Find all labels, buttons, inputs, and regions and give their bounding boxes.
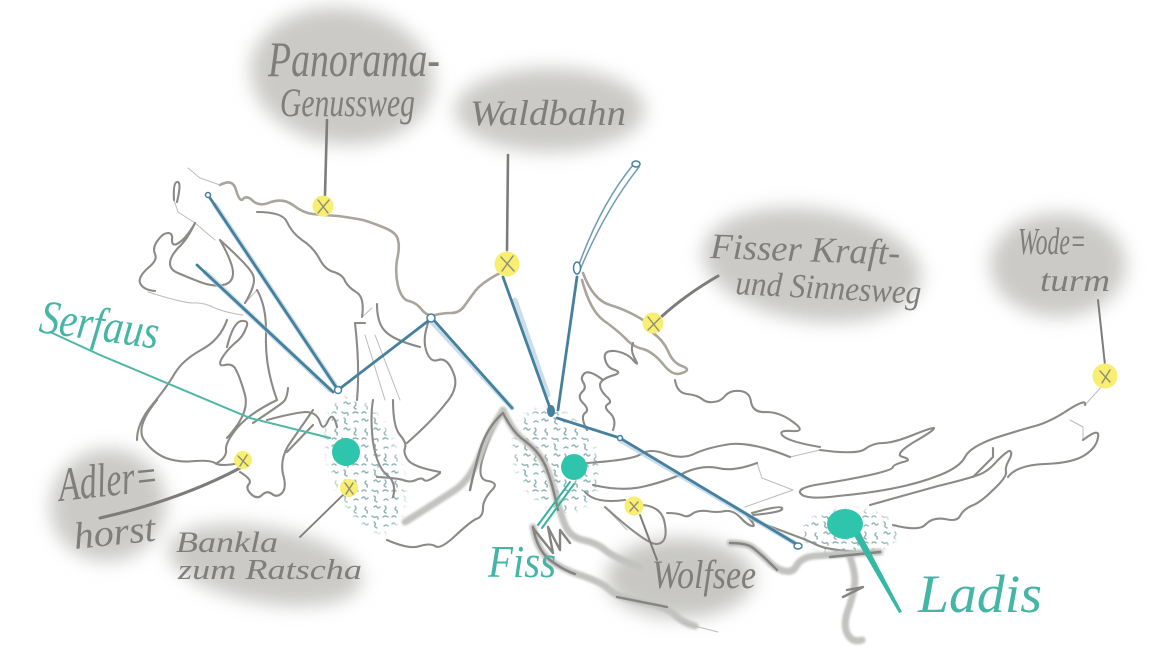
cable car: Fiss to Ladis [557,418,798,545]
labels: handwritten attractions [53,31,1110,597]
label blob: Panorama-Genussweg [241,0,443,156]
label: Fiss: Fiss [487,536,556,587]
label: turm: turm [1040,262,1110,298]
marker: Bankla zum Ratscha [340,479,358,497]
cable car: to middle station [338,318,432,390]
label: Genussweg: Genussweg [280,80,415,125]
cable halos [205,205,798,545]
stations [206,161,802,549]
cable car: Waldbahn [432,318,512,408]
terrain contours [137,168,1103,552]
label: Wolfsee: Wolfsee [652,552,756,597]
label blob: Adlerhorst [34,433,182,577]
trails and terrain lines [137,168,1103,552]
stippled village areas [322,394,898,552]
label blob: Bankla zum Ratscha [162,511,368,619]
label: Serfaus: Serfaus [36,290,163,360]
markers: yellow points [234,196,1118,516]
dot: Ladis [827,509,863,539]
marker: Waldbahn [494,252,520,276]
cable car: left long line [208,195,338,390]
hiking trail: Panorama-Genussweg [220,182,500,315]
label: Waldbahn: Waldbahn [470,93,626,133]
marker: Fisser Kraft- und Sinnesweg [642,312,664,334]
label: Adler=: Adler= [53,449,161,512]
label blob: Wodeturm [990,213,1126,317]
roads [405,410,880,641]
label blob: Waldbahn [455,68,645,152]
marker: Wodeturm [1092,364,1118,388]
label: Ladis: Ladis [917,564,1042,624]
cable car: upper thin double line [577,165,639,270]
label: Fisser Kraft-: Fisser Kraft- [709,226,901,273]
label blob: Wolfsee [606,538,754,618]
cable car: left short line [197,265,333,392]
marker: Panorama-Genussweg [312,196,334,216]
marker: Wolfsee [624,496,644,516]
teal town leaders [50,332,902,613]
dot: Serfaus [332,438,360,466]
label: zum Ratscha: zum Ratscha [177,554,362,586]
dot: Fiss [561,454,587,480]
label: und Sinnesweg: und Sinnesweg [735,265,922,312]
marker: Adlerhorst [234,451,252,469]
road details [470,413,880,632]
label: Panorama-: Panorama- [267,31,440,87]
cable car lines [197,161,802,549]
village dots [332,438,863,539]
labels: towns [36,290,1042,624]
label: Bankla: Bankla [176,526,278,559]
hiking trail: Fisser Kraft- und Sinnesweg [582,273,687,374]
label: Wode=: Wode= [1018,221,1086,263]
cable car: Fiss north [558,277,577,410]
label: horst: horst [72,507,159,558]
label blob: Fisser Kraft- und Sinnesweg [695,194,929,336]
cable car: Fiss up to summit [503,277,550,408]
leader lines [100,120,1105,560]
